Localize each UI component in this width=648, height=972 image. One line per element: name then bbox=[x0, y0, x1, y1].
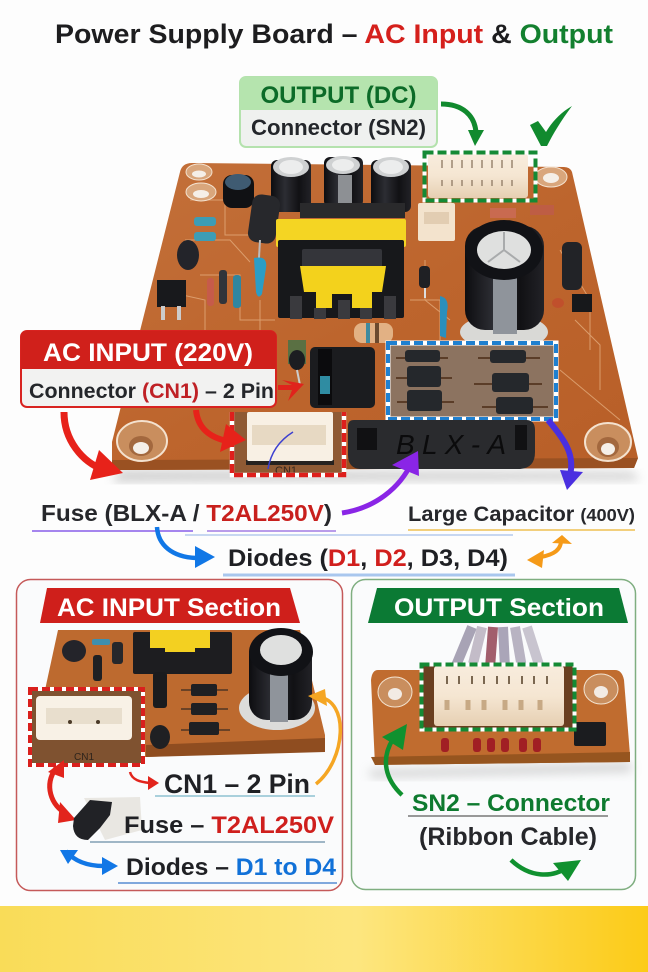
main circuit board photo bbox=[112, 156, 640, 482]
white small connector bbox=[418, 203, 455, 241]
black fuse body BLX-A bbox=[348, 420, 535, 469]
arrow: AC callout to board corner bbox=[64, 412, 123, 480]
right components bbox=[490, 205, 592, 312]
diodes label: Diodes (D1, D2, D3, D4) bbox=[228, 545, 508, 572]
arrow: orange double bbox=[527, 535, 572, 568]
AC section CN1 connector: CN1 bbox=[74, 752, 94, 763]
large capacitor label: Large Capacitor (400V) bbox=[408, 503, 635, 526]
yellow footer band bbox=[0, 906, 648, 972]
output section banner bbox=[368, 588, 628, 623]
striped resistor bbox=[354, 323, 393, 343]
AC section capacitor bbox=[239, 628, 315, 730]
black fuse holder bbox=[310, 347, 375, 408]
small capacitor bbox=[223, 174, 254, 208]
output connector with green dashed box bbox=[424, 152, 536, 200]
arrow: connector callout to fuse holder bbox=[278, 380, 304, 401]
transformer bbox=[276, 219, 406, 319]
output section board photo bbox=[368, 670, 632, 778]
arrow: green swoosh bbox=[511, 860, 581, 881]
divider line bbox=[408, 815, 608, 817]
output callout bbox=[240, 77, 437, 147]
arrow: red double bbox=[48, 760, 76, 823]
AC section board photo bbox=[30, 628, 325, 765]
label underline bbox=[90, 841, 325, 843]
panel: output section bbox=[352, 580, 636, 890]
arrow: orange to capacitor bbox=[308, 689, 340, 784]
CN1 2 pin label: CN1 – 2 Pin bbox=[164, 769, 310, 799]
axial diode bbox=[247, 193, 281, 275]
label underline bbox=[155, 795, 315, 797]
output section banner: OUTPUT Section bbox=[394, 594, 604, 622]
AC section CN1 connector bbox=[30, 689, 143, 765]
arrow: AC callout to CN1 bbox=[196, 410, 246, 452]
white AC connector with red dashed box bbox=[232, 412, 344, 477]
large capacitor bbox=[460, 220, 548, 350]
resistors bbox=[194, 217, 241, 308]
AC section banner bbox=[40, 588, 300, 623]
diodes label: Diodes – D1 to D4 bbox=[126, 854, 337, 881]
three top capacitors bbox=[271, 156, 411, 218]
small axial and blue parts bbox=[419, 266, 448, 338]
label underlines bbox=[32, 530, 635, 575]
arrow: SN2 label to connector bbox=[382, 724, 407, 795]
mounting holes bbox=[117, 164, 631, 461]
arrow: blue double bbox=[60, 850, 118, 875]
ribbon cable bbox=[455, 627, 540, 668]
output callout: Connector (SN2) bbox=[251, 115, 426, 140]
AC input callout: AC INPUT (220V) bbox=[43, 339, 253, 367]
blue capacitor bbox=[254, 257, 266, 297]
ribbon cable label: (Ribbon Cable) bbox=[419, 823, 597, 851]
panel: AC input section bbox=[16, 580, 342, 890]
output callout: OUTPUT (DC) bbox=[260, 82, 416, 109]
traces bbox=[140, 200, 620, 420]
title: Power Supply Board – AC Input & Output bbox=[55, 19, 613, 49]
arrow: output callout to connector bbox=[441, 104, 484, 146]
black fuse body BLX-A: BLX-A bbox=[396, 429, 506, 460]
transistors bbox=[157, 240, 199, 320]
white AC connector with red dashed box: CN1 bbox=[275, 465, 297, 477]
fuse label: Fuse (BLX-A / T2AL250V ) bbox=[41, 500, 332, 526]
icon: check mark bbox=[530, 106, 572, 146]
AC section banner: AC INPUT Section bbox=[57, 594, 281, 622]
arrow: to CN1 2 pin label bbox=[130, 772, 159, 790]
label underline bbox=[118, 882, 337, 884]
diode block bbox=[388, 343, 556, 419]
arrow: to large capacitor bbox=[548, 420, 583, 490]
arrow: fuse label to fuse bbox=[342, 451, 419, 513]
arrow: to diodes label bbox=[157, 527, 215, 568]
AC input callout: Connector (CN1) – 2 Pin bbox=[29, 379, 274, 403]
fuse component image bbox=[73, 797, 142, 840]
output section SN2 connector bbox=[422, 664, 574, 730]
fuse label: Fuse – T2AL250V bbox=[124, 812, 334, 839]
small transistor bbox=[288, 340, 306, 385]
SN2 label: SN2 – Connector bbox=[412, 790, 610, 817]
AC input callout bbox=[21, 331, 276, 407]
